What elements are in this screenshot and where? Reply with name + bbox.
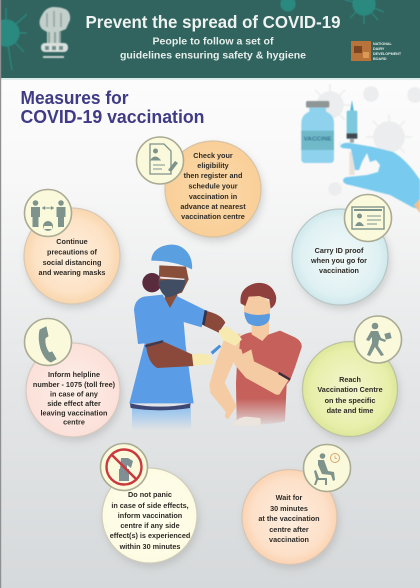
step: wait 30 minutes: 30 minutes <box>270 504 308 513</box>
icon: form with pen <box>136 137 184 184</box>
step: do not panic: Do not panic <box>128 490 172 499</box>
step: continue precautions: Continue <box>56 237 88 246</box>
NDDB logo: DAIRY <box>373 47 385 51</box>
step: wait 30 minutes: Wait for <box>276 493 303 502</box>
vaccine vial, syringe and gloved hand <box>301 100 420 213</box>
step: wait 30 minutes: at the vaccination <box>258 514 320 523</box>
step: inform helpline <box>24 318 122 441</box>
step: do not panic <box>100 444 199 567</box>
nurse <box>129 245 242 430</box>
icon: walking person <box>354 316 402 363</box>
step: inform helpline: centre <box>63 418 85 426</box>
subtitle: guidelines ensuring safety & hygiene <box>120 50 307 62</box>
NDDB logo: DEVELOPMENT <box>373 52 402 56</box>
step: wait 30 minutes <box>242 444 350 568</box>
step: inform helpline: Inform helpline <box>48 370 100 379</box>
step: carry ID proof <box>292 194 392 309</box>
step: do not panic: in case of side effects, <box>111 501 189 510</box>
step: carry ID proof: Carry ID proof <box>315 246 364 255</box>
heading: Measures for <box>20 88 128 108</box>
heading <box>20 88 204 127</box>
subtitle: People to follow a set of <box>152 36 274 48</box>
step: continue precautions <box>24 190 122 308</box>
step: check eligibility: advance at nearest <box>180 202 246 211</box>
step: reach centre: on the specific <box>325 396 375 405</box>
step: reach centre: date and time <box>327 406 373 415</box>
nurse hands <box>192 353 213 366</box>
step: do not panic: within 30 minutes <box>119 542 180 551</box>
step: check eligibility: vaccination in <box>189 192 237 201</box>
step: do not panic: centre if any side <box>120 521 180 530</box>
step: inform helpline: leaving vaccination <box>41 408 107 418</box>
emblem of India <box>40 7 70 58</box>
step: check eligibility: vaccination centre <box>181 212 245 221</box>
syringe <box>347 100 357 175</box>
icon: telephone <box>24 318 72 366</box>
step: check eligibility: Check your <box>193 151 233 160</box>
step: carry ID proof: when you go for <box>310 256 367 265</box>
step: continue precautions: and wearing masks <box>39 268 105 277</box>
background virus decorations <box>309 84 420 195</box>
step: check eligibility: schedule your <box>188 182 238 190</box>
heading: COVID-19 vaccination <box>20 107 204 127</box>
NDDB logo <box>351 41 402 61</box>
icon: social distancing <box>24 190 72 236</box>
icon: no panic sign <box>100 444 148 490</box>
subtitle <box>120 36 307 62</box>
NDDB logo: BOARD <box>373 57 387 61</box>
step: do not panic: effect(s) is experienced <box>110 531 190 540</box>
header band <box>0 0 420 80</box>
icon: seated person with clock <box>304 444 350 492</box>
nurse head <box>142 273 162 292</box>
vial: VACCINE <box>304 136 332 142</box>
NDDB logo: NATIONAL <box>373 42 393 46</box>
step: wait 30 minutes: centre after <box>269 525 309 534</box>
step: reach centre <box>302 316 402 440</box>
step: inform helpline: side effect after <box>47 399 101 408</box>
gloved hand <box>340 141 420 210</box>
step: continue precautions: precautions of <box>47 248 98 256</box>
left edge line <box>0 0 1 588</box>
step: check eligibility: then register and <box>184 171 242 180</box>
step: wait 30 minutes: vaccination <box>269 535 309 544</box>
step: continue precautions: social distancing <box>43 258 101 267</box>
step: reach centre: Reach <box>339 375 361 384</box>
illustration: nurse vaccinating patient <box>129 245 302 430</box>
step: check eligibility <box>136 137 263 241</box>
header virus decorations <box>0 0 384 70</box>
title: Prevent the spread of COVID-19 <box>86 12 340 32</box>
step: check eligibility: eligibility <box>197 161 229 170</box>
patient <box>209 283 302 426</box>
step: carry ID proof: vaccination <box>319 266 359 275</box>
step: do not panic: inform vaccination <box>118 511 182 520</box>
step: inform helpline: number - 1075 (toll free) <box>33 380 116 389</box>
step: inform helpline: in case of any <box>50 390 98 398</box>
icon: ID card <box>344 194 392 242</box>
step: reach centre: Vaccination Centre <box>317 385 383 394</box>
